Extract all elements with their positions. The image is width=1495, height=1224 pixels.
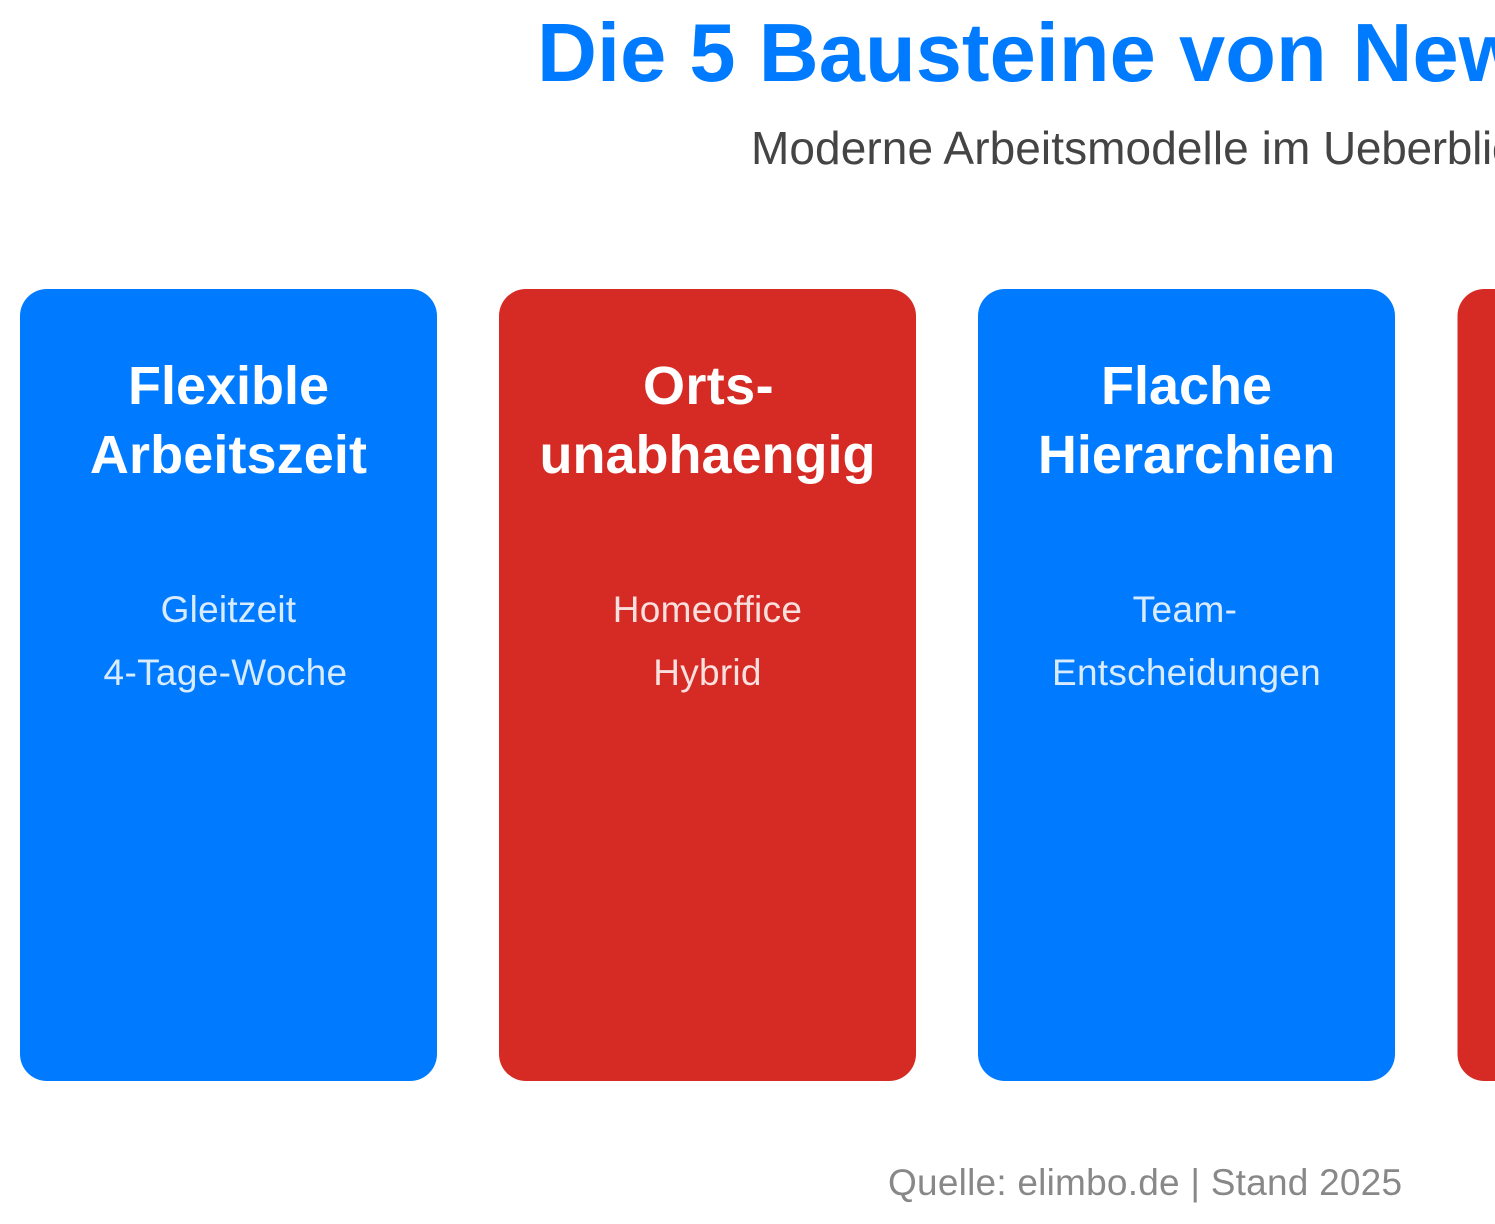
panel: Flexible Arbeitszeit: 4-Tage-Woche — [104, 652, 347, 693]
panel: Flache Hierarchien — [978, 289, 1395, 1081]
panel: Flexible Arbeitszeit: Gleitzeit — [161, 589, 297, 630]
subtitle: Moderne Arbeitsmodelle im — [751, 122, 1310, 174]
panel: Ortsunabhaengig: Orts- — [643, 356, 774, 416]
panel: Ortsunabhaengig: unabhaengig — [540, 425, 876, 485]
panel: Ortsunabhaengig: Hybrid — [653, 652, 762, 693]
panel: Flexible Arbeitszeit — [20, 289, 437, 1081]
panel: Flache Hierarchien: Entscheidungen — [1052, 652, 1321, 693]
panel: Flexible Arbeitszeit: Flexible — [128, 356, 329, 416]
panel: Ortsunabhaengig: Homeoffice — [613, 589, 802, 630]
panel: cropped fourth card — [1458, 289, 1495, 1081]
panel: Flexible Arbeitszeit: Arbeitszeit — [90, 425, 367, 485]
panel: Flache Hierarchien: Hierarchien — [1038, 425, 1335, 485]
panel: Ortsunabhaengig — [499, 289, 916, 1081]
title: Die 5 Bausteine von — [537, 6, 1327, 99]
source note: Quelle: elimbo.de | Stand 2025 — [888, 1162, 1402, 1203]
panel: Flache Hierarchien: Flache — [1101, 356, 1272, 416]
panel: Flache Hierarchien: Team- — [1133, 589, 1237, 630]
